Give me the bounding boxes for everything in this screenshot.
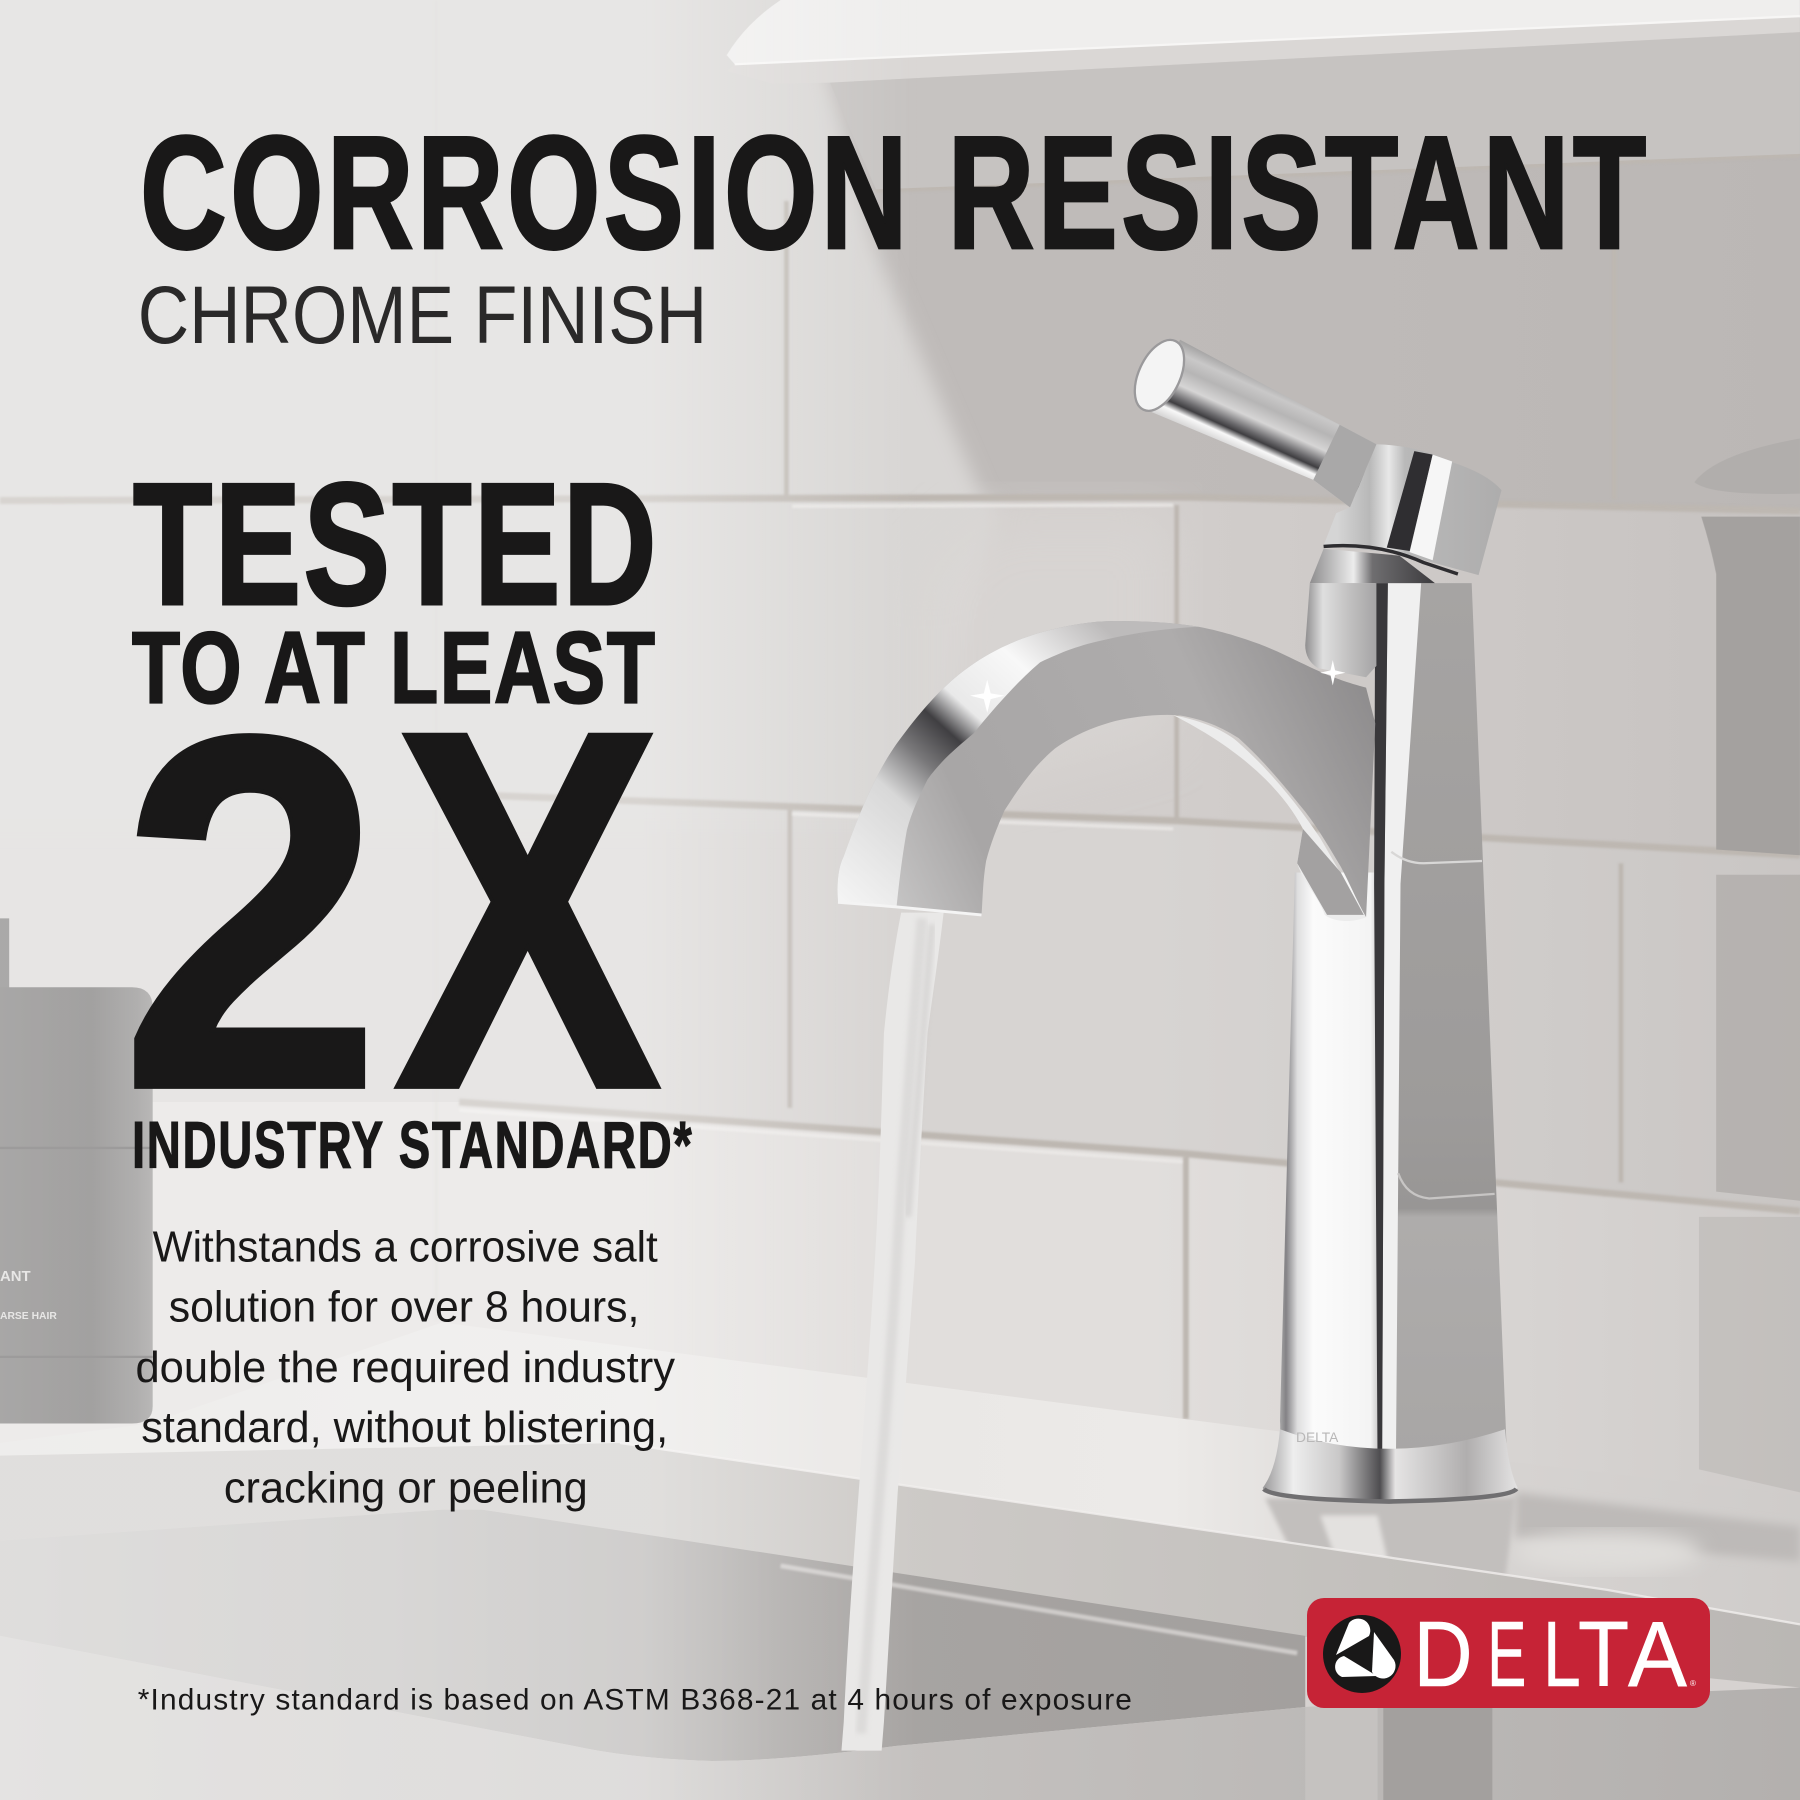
body text block: double the required industry: [135, 1344, 675, 1392]
body text block: Withstands a corrosive salt: [153, 1224, 658, 1272]
faucet seam white strip: [1382, 583, 1421, 1464]
body text block: standard, without blistering,: [141, 1404, 668, 1452]
spout underside reflection: [1173, 715, 1366, 921]
logo wordmark: T: [1578, 1602, 1629, 1706]
faucet base: [1263, 1429, 1518, 1500]
left white fade overlay: [0, 0, 918, 1800]
vase at right: [1694, 439, 1800, 1492]
collar: [1305, 583, 1376, 677]
logo wordmark: A: [1628, 1603, 1687, 1707]
spout bright left edge: [838, 621, 1198, 907]
faucet seam dark strip: [1374, 583, 1388, 1464]
handle end cap: [1125, 332, 1194, 418]
jar at left: ARSE HAIR: [0, 1311, 57, 1322]
hub dark stripe: [1387, 451, 1433, 551]
logo wordmark: [1413, 1602, 1687, 1707]
spout sparkle right: [1320, 660, 1345, 685]
logo wordmark: L: [1543, 1603, 1581, 1707]
registered mark: ®: [1690, 1679, 1696, 1688]
spout sparkle left: [970, 680, 1004, 713]
neck under hub: [1310, 549, 1435, 583]
jar at left: [0, 918, 153, 1423]
headline: industry standard: INDUSTRY STANDARD*: [132, 1108, 693, 1181]
logo wordmark: E: [1487, 1603, 1526, 1706]
faucet right panel: [1376, 583, 1507, 1464]
water stream: [841, 913, 944, 1751]
jar at left: ANT: [0, 1268, 31, 1285]
counter front edge: [0, 1443, 1800, 1688]
headline: 2X: [120, 626, 664, 1196]
faucet left column: [1277, 872, 1381, 1464]
footnote: *Industry standard is based on ASTM B368-21 at 4 hours of exposure: [138, 1683, 1132, 1716]
body text block: solution for over 8 hours,: [169, 1283, 639, 1331]
body text block: cracking or peeling: [224, 1465, 588, 1513]
body text block: [135, 1224, 675, 1513]
faucet: [838, 332, 1518, 1502]
subtitle: CHROME FINISH: [138, 270, 707, 361]
headline: 2X: X: [393, 626, 664, 1196]
counter right shadow and light patch: [1515, 1492, 1800, 1561]
headline: to at least: TO AT LEAST: [132, 613, 657, 725]
headline: 2X: 2: [120, 632, 382, 1194]
icon: delta triangle mark: [1323, 1615, 1401, 1693]
panel reflections: [1391, 852, 1482, 863]
sink highlights: [439, 1529, 444, 1636]
logo wordmark: D: [1413, 1602, 1473, 1706]
tile highlights: [459, 505, 1182, 1162]
sink rim below: [0, 1636, 1800, 1800]
handle hub: [1324, 444, 1502, 575]
counter top surface: [0, 1322, 1800, 1624]
spout arch: [838, 621, 1375, 917]
faucet reflection on counter: [1265, 1498, 1515, 1590]
sink basin: [0, 1510, 1305, 1761]
handle lever: [1143, 340, 1376, 507]
faucet engraved brand: DELTA: [1296, 1430, 1339, 1445]
hub slit: [1324, 546, 1458, 574]
drain reflection columns: [1305, 1699, 1492, 1800]
headline: tested: TESTED: [133, 447, 659, 641]
light wedge on upper wall: [0, 0, 999, 827]
hub white stripe: [1410, 455, 1452, 560]
Delta logo: [1307, 1598, 1710, 1708]
lever neck: [1313, 425, 1376, 507]
tile grout lines: [0, 0, 1800, 1419]
cabinet above: [727, 0, 1800, 189]
